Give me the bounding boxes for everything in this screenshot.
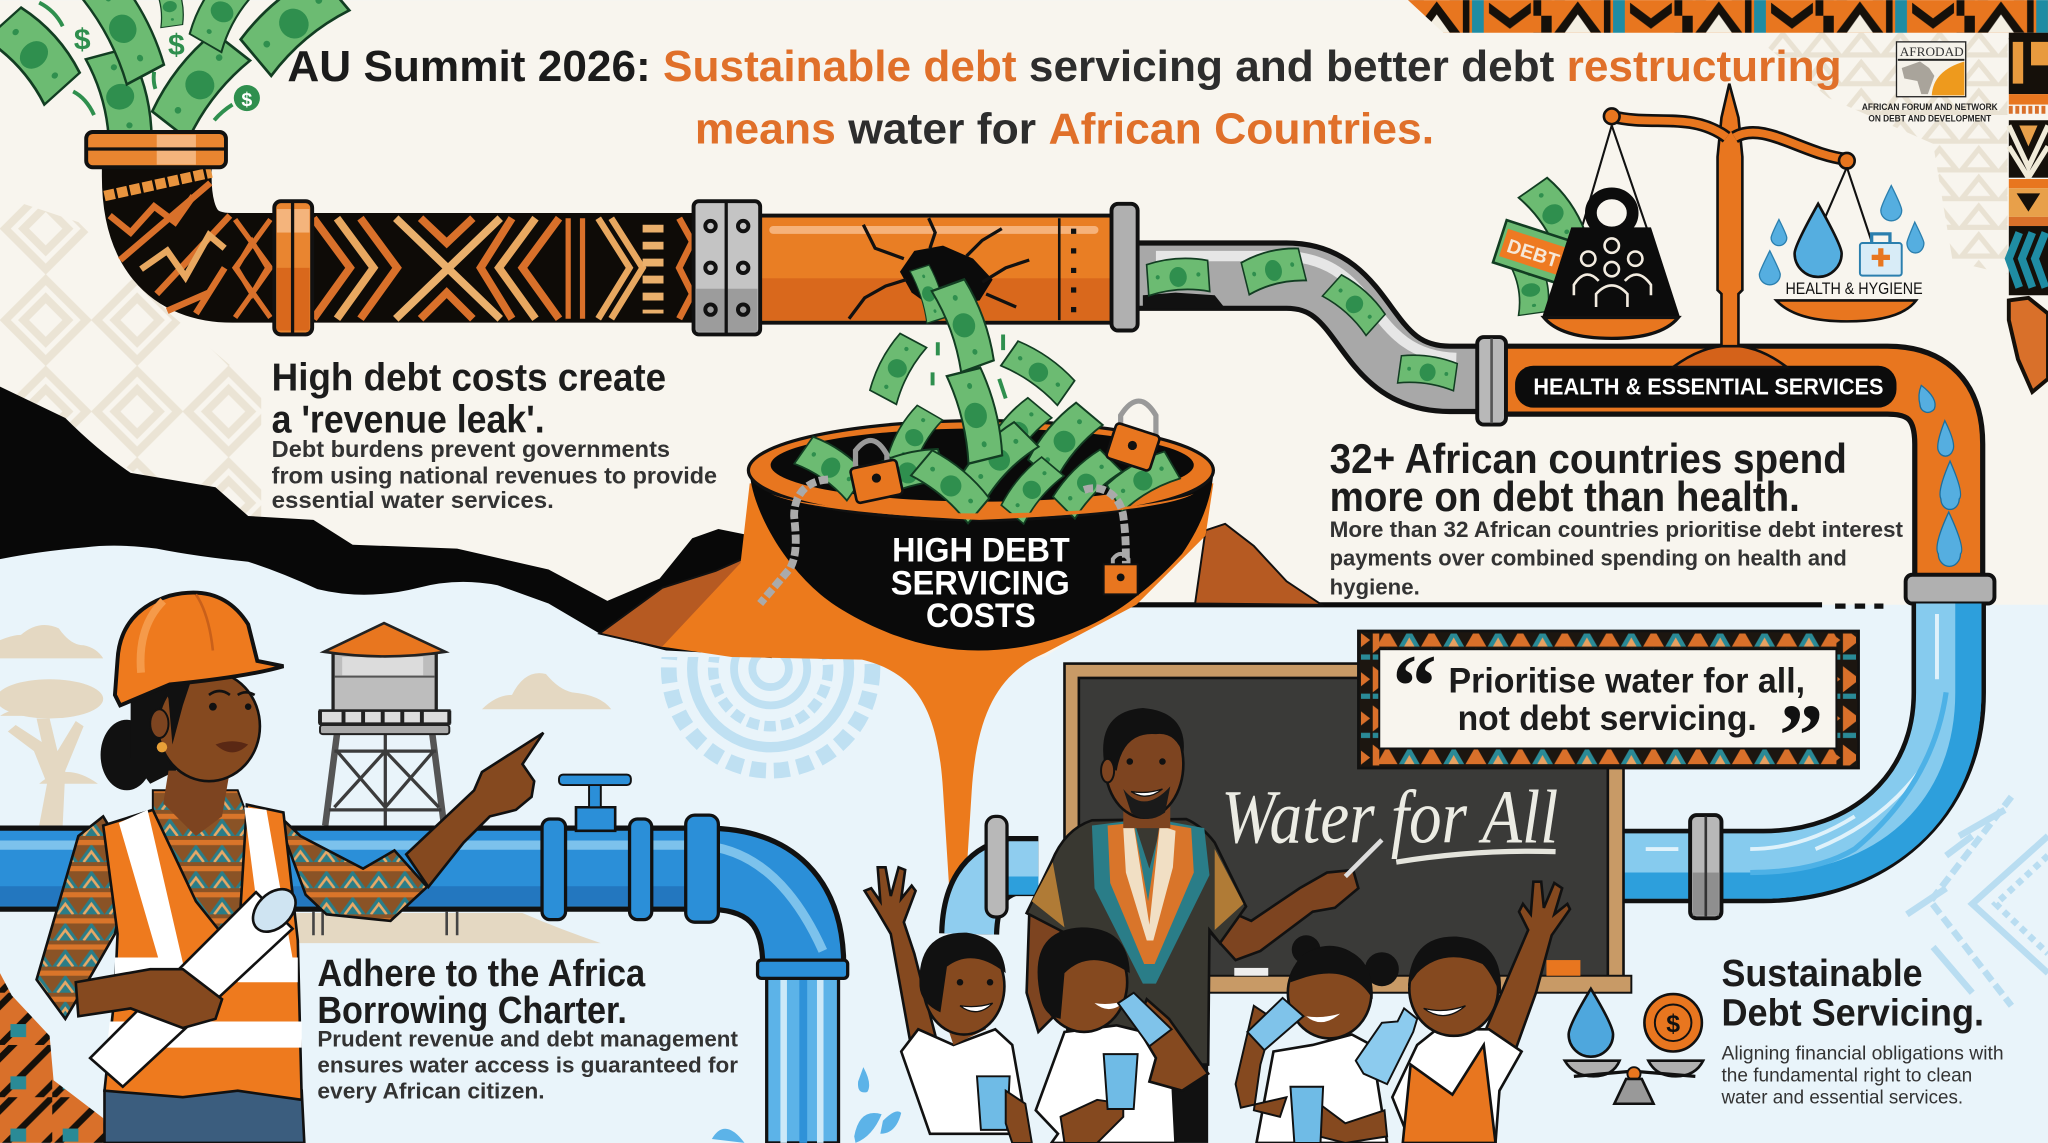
icon balance pans (1565, 1061, 1703, 1076)
shirt (1392, 1029, 1522, 1143)
shirt (1256, 1035, 1387, 1143)
logo: AFRODAD: AFRODAD (1900, 45, 1964, 59)
text block: borrowing charter: Prudent revenue and debt management (317, 1026, 739, 1051)
text block: 32+ countries (1330, 435, 1904, 599)
glass at mouth (1118, 993, 1172, 1046)
hair bun (101, 720, 153, 790)
text block: revenue leak: Debt burdens prevent governments (272, 436, 670, 462)
hard hat (115, 593, 283, 705)
rolled plans (90, 892, 293, 1087)
orange services pipe (1502, 380, 1962, 581)
text block: sustainable debt servicing (1721, 953, 2004, 1109)
grey flange above blue pipe (1906, 575, 1994, 604)
quote box: not debt servicing. (1458, 699, 1757, 738)
padlock left (850, 440, 903, 503)
icon: water and coin balance (1565, 989, 1703, 1104)
title: means water for African Countries. (695, 106, 1434, 154)
neck and head (1123, 797, 1170, 828)
tower legs (325, 734, 444, 826)
logo: AFRODAD (1862, 42, 1998, 124)
ledge (1202, 976, 1631, 993)
background clouds (0, 625, 611, 709)
small padlock (1104, 554, 1138, 594)
orange debt spill behind bowl (662, 483, 1213, 914)
scale pole (1718, 84, 1742, 346)
hair buns (1292, 935, 1320, 964)
bowl label (891, 532, 1070, 635)
quote box: ” (1779, 687, 1823, 785)
blue falling water column (712, 960, 901, 1143)
top left falling money: $ (168, 29, 185, 62)
neck (163, 771, 230, 836)
text block: sustainable debt servicing: Sustainable (1721, 953, 1923, 995)
logo: AFRODAD: ON DEBT AND DEVELOPMENT (1868, 114, 1992, 124)
text block: borrowing charter: ensures water access is guaranteed for (317, 1052, 738, 1077)
scale beam (1612, 116, 1847, 159)
scale strings (1580, 125, 1873, 246)
head (1409, 942, 1498, 1036)
water leak drops (1919, 385, 1962, 566)
horizontal divider line (1123, 603, 1822, 607)
decorative border: right kente strip (2009, 33, 2048, 392)
water tower (313, 623, 457, 935)
text block: 32+ countries: 32+ African countries spend (1330, 435, 1847, 482)
safety vest (103, 805, 302, 1100)
mountains left (600, 555, 771, 657)
background tree (0, 679, 103, 826)
health and essential services label (1515, 366, 1896, 408)
chevrons and X section (313, 218, 692, 319)
right arm (1319, 1104, 1387, 1143)
left arm (1027, 914, 1064, 1032)
child four (1356, 882, 1570, 1143)
left pan (1544, 317, 1678, 338)
text block: revenue leak (272, 357, 717, 513)
valve (576, 807, 615, 831)
chalk (1345, 840, 1382, 876)
raised arm (865, 867, 938, 1045)
trousers (104, 1091, 304, 1143)
debt weight with people icon (1591, 193, 1633, 233)
text block: borrowing charter: Adhere to the Africa (317, 953, 646, 995)
text block: borrowing charter: every African citizen. (317, 1079, 545, 1104)
background: cream upper panel (0, 0, 2048, 657)
blouse (153, 790, 255, 954)
chalk underline (1396, 851, 1556, 862)
text block: revenue leak: a 'revenue leak'. (272, 398, 545, 441)
tower deck (320, 711, 449, 724)
text block: revenue leak: essential water services. (272, 487, 554, 513)
shirt (1036, 1025, 1176, 1143)
bills in pipe (1146, 257, 1210, 296)
logo: AFRODAD: AFRICAN FORUM AND NETWORK (1862, 102, 1998, 112)
splash (712, 1067, 901, 1143)
lower glass (1104, 1054, 1138, 1109)
head (158, 671, 260, 781)
blue pipe behind man (969, 816, 1038, 934)
arm holding top glass (1136, 999, 1208, 1091)
splash marks (39, 3, 232, 120)
hand (1006, 1091, 1032, 1143)
arm holding lower glass (1061, 1100, 1123, 1143)
text block: revenue leak: High debt costs create (272, 357, 666, 400)
dashiki embroidery (1092, 820, 1209, 984)
balance scale: DEBT (1504, 235, 1562, 273)
first aid box (1860, 243, 1902, 276)
patterned sleeve right (276, 812, 427, 921)
blue water pipe right (1624, 604, 1968, 886)
text block: 32+ countries: payments over combined spending on health and (1330, 546, 1847, 571)
trousers (1147, 1058, 1208, 1143)
decorative pattern: beige tribal top right (1750, 33, 2008, 274)
orange collar (274, 201, 312, 334)
icon drop (1569, 989, 1613, 1057)
water drop (1795, 204, 1842, 277)
shirt (901, 1029, 1028, 1134)
dashiki shirt (1027, 819, 1246, 1065)
quote marks: “ (1392, 638, 1437, 736)
money pile (794, 367, 1180, 524)
child one (865, 867, 1032, 1143)
title (287, 43, 1842, 154)
clamp on blue pipe (1690, 815, 1721, 918)
text block: revenue leak: from using national revenues to provide (272, 462, 717, 488)
balance scale (1493, 84, 1924, 367)
black wavy divider (0, 387, 842, 660)
pipe flanges (542, 819, 566, 920)
falling bills from crack (867, 264, 1077, 405)
icon: water and coin balance: $ (1666, 1011, 1680, 1038)
raised arm (1484, 882, 1570, 1058)
high debt servicing bowl (748, 367, 1213, 651)
padlock right (1106, 401, 1160, 471)
engineer woman (37, 593, 543, 1143)
text block: sustainable debt servicing: the fundamental right to clean (1721, 1065, 1972, 1087)
decorative border: top kente strip (1408, 0, 2048, 33)
crack (900, 246, 993, 306)
head (1288, 947, 1371, 1038)
cracked orange pipe section (758, 216, 1113, 323)
quote box (1358, 631, 1859, 785)
top flange (86, 132, 226, 167)
forearm and hand holding plans (76, 969, 222, 1028)
text block: sustainable debt servicing: Aligning financial obligations with (1721, 1042, 2004, 1064)
glass at mouth (1247, 998, 1304, 1050)
decorative pattern: beige tribal left (0, 196, 261, 523)
lower glass (1290, 1087, 1323, 1143)
earring (157, 742, 167, 752)
flange right of orange pipe (1112, 204, 1138, 331)
right pan (1776, 300, 1916, 321)
chalk text water for all: Water for All (1221, 776, 1558, 860)
top left falling money: $ (241, 89, 252, 111)
debt bills (1519, 175, 1589, 252)
blue pipe left (0, 775, 823, 967)
bowl label: HIGH DEBT (892, 532, 1070, 570)
left arm (1236, 1006, 1287, 1117)
top left falling money (0, 0, 349, 146)
neck (947, 1019, 986, 1045)
pipe crack (1143, 293, 1225, 308)
health and hygiene label: HEALTH & HYGIENE (1785, 280, 1923, 298)
chalkboard (1064, 664, 1631, 993)
bowl label: COSTS (926, 597, 1036, 635)
mountains right (1195, 524, 1322, 605)
grey drained pipe (1130, 245, 1482, 391)
arm to chalk (1208, 870, 1358, 960)
decorative pattern: blue tribal right (1907, 797, 2048, 1006)
head (923, 938, 1004, 1035)
chains (760, 479, 1126, 604)
money bills (0, 4, 84, 105)
text block: sustainable debt servicing: Debt Servicing. (1721, 992, 1984, 1034)
scale base (1673, 346, 1787, 367)
elbow tribal lines (104, 172, 230, 314)
text block: borrowing charter: Borrowing Charter. (317, 990, 627, 1032)
forearm pointing (406, 733, 543, 887)
tower roof (324, 623, 445, 656)
tower tank (333, 653, 436, 712)
patterned sleeve left (37, 816, 131, 1019)
bowl label: SERVICING (891, 564, 1070, 602)
hair (131, 673, 176, 784)
child two (1036, 927, 1208, 1143)
decorative pattern: blue mandala (660, 657, 880, 778)
flange left of orange services pipe (1477, 337, 1506, 425)
dollar signs: $ (74, 24, 91, 57)
small water drops (1759, 186, 1924, 285)
divider dots (1835, 604, 1883, 608)
text block: borrowing charter (317, 953, 739, 1104)
vest (1403, 1045, 1496, 1143)
quote text: Prioritise water for all, (1448, 661, 1805, 700)
text block: 32+ countries: hygiene. (1330, 574, 1420, 599)
title: AU Summit 2026: Sustainable debt servicing and better debt restructuring (287, 43, 1842, 91)
steel clamp (694, 201, 760, 334)
text block: sustainable debt servicing: water and essential services. (1721, 1087, 1963, 1109)
teacher (1027, 708, 1382, 1143)
head (1041, 933, 1127, 1032)
water bottle (1356, 1008, 1417, 1084)
patterned debt pipe (86, 132, 699, 334)
icon coin (1644, 994, 1702, 1052)
text block: 32+ countries: More than 32 African countries prioritise debt interest (1330, 517, 1904, 542)
front rim redraw (771, 494, 1194, 520)
child three (1236, 935, 1399, 1143)
diamond section (235, 220, 270, 317)
health and essential services label: HEALTH & ESSENTIAL SERVICES (1533, 374, 1883, 400)
decorative pattern: bottom left kente (0, 973, 104, 1143)
text block: 32+ countries: more on debt than health. (1330, 473, 1800, 520)
glass (977, 1076, 1010, 1130)
background ground (294, 913, 601, 943)
